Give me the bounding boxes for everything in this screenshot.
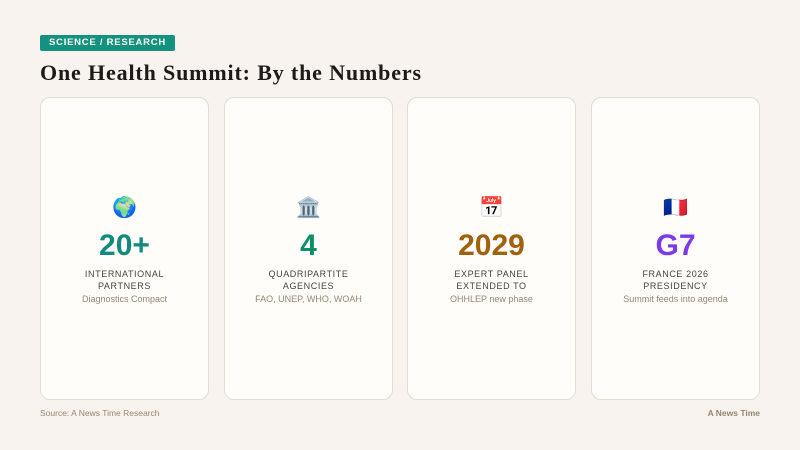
- label: INTERNATIONAL: [85, 269, 164, 279]
- icon: flag: 🇫🇷: [663, 197, 688, 219]
- number: 4: [300, 229, 317, 262]
- note: Diagnostics Compact: [82, 294, 167, 304]
- source: Source: A News Time Research: [40, 408, 160, 418]
- icon: globe: 🌍: [112, 197, 137, 219]
- note: OHHLEP new phase: [450, 294, 533, 304]
- card: G7: [591, 97, 760, 400]
- label: PRESIDENCY: [643, 281, 708, 291]
- tag: [40, 35, 175, 51]
- note: Summit feeds into agenda: [623, 294, 728, 304]
- icon: building: 🏛️: [296, 197, 321, 219]
- card: partners: [40, 97, 209, 400]
- label: PARTNERS: [98, 281, 151, 291]
- label: FRANCE 2026: [642, 269, 709, 279]
- label: [85, 269, 164, 291]
- label: AGENCIES: [283, 281, 334, 291]
- label: EXPERT PANEL: [454, 269, 529, 279]
- brand: A News Time: [708, 408, 760, 418]
- title: One Health Summit: By the Numbers: [40, 60, 422, 85]
- card: agencies: [224, 97, 393, 400]
- number: 20+: [99, 229, 150, 262]
- label: [268, 269, 348, 291]
- label: QUADRIPARTITE: [268, 269, 348, 279]
- card: expert panel: [407, 97, 576, 400]
- note: FAO, UNEP, WHO, WOAH: [255, 294, 362, 304]
- number: G7: [655, 229, 696, 262]
- icon: calendar: 📅: [479, 197, 504, 219]
- label: [642, 269, 709, 291]
- label: EXTENDED TO: [456, 281, 527, 291]
- number: 2029: [458, 229, 525, 262]
- tag: SCIENCE / RESEARCH: [49, 37, 166, 48]
- label: [454, 269, 529, 291]
